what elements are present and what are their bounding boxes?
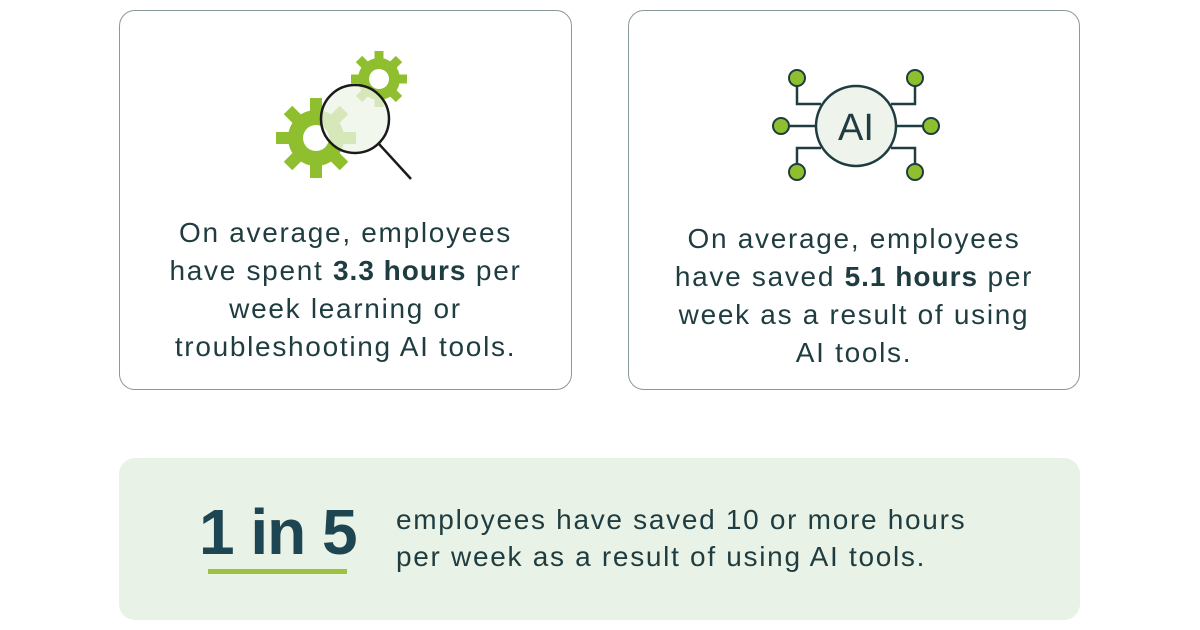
text: hours spent: have spent 3.3 hours per: [169, 255, 522, 286]
icon: gears with magnifier: [276, 51, 412, 180]
text: hours saved: On average, employees: [688, 223, 1020, 254]
icon: AI chip network: AI: [838, 107, 874, 149]
text: hours saved: week as a result of using: [679, 299, 1029, 330]
text: hours saved: AI tools.: [796, 337, 912, 368]
text: hours spent: week learning or: [229, 293, 462, 324]
text: hours saved: [675, 223, 1033, 368]
panel: time saved: [628, 10, 1080, 390]
text: callout description: [396, 504, 966, 572]
panel: time spent learning: [119, 10, 572, 390]
underline: [208, 569, 347, 574]
text: callout description: per week as a result of using AI tools.: [396, 541, 926, 572]
stat: 1 in 5: 1 in 5: [199, 496, 357, 568]
text: hours saved: have saved 5.1 hours per: [675, 261, 1033, 292]
text: hours spent: On average, employees: [179, 217, 512, 248]
text: callout description: employees have saved 10 or more hours: [396, 504, 966, 535]
icon: AI chip network: [772, 69, 940, 181]
text: hours spent: troubleshooting AI tools.: [175, 331, 516, 362]
panel: 1 in 5 callout: [119, 458, 1080, 620]
text: hours spent: [169, 217, 522, 362]
